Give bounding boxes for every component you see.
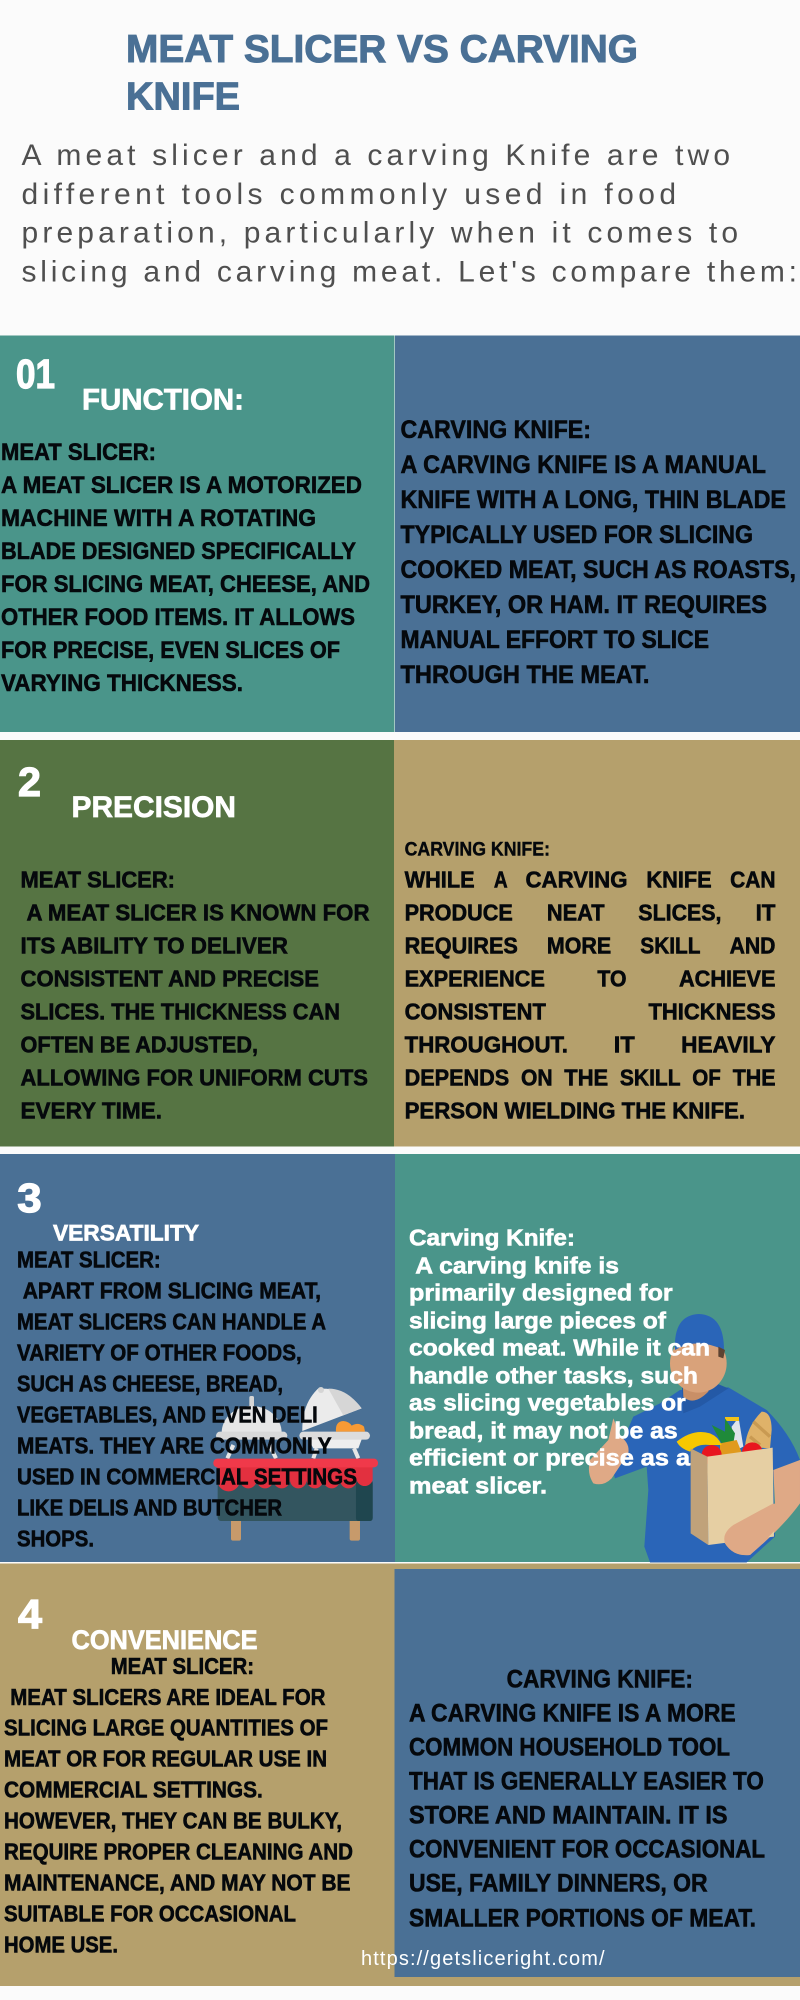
text: meat slicer versatility: MEAT SLICER:: [17, 1246, 161, 1272]
text: carving knife precision: A: [494, 866, 508, 892]
text: carving knife convenience: CARVING KNIFE:: [507, 1665, 693, 1693]
text: carving knife precision: IT: [756, 899, 776, 925]
text: meat slicer versatility: SHOPS.: [17, 1525, 94, 1551]
text: meat slicer versatility: VARIETY OF OTHER FOODS,: [17, 1339, 302, 1365]
text: meat slicer versatility: [17, 1246, 357, 1551]
text: meat slicer function: FOR SLICING MEAT, CHEESE, AND: [1, 571, 370, 598]
text: carving knife versatility: slicing large pieces of: [409, 1307, 666, 1333]
text: carving knife precision: [405, 866, 776, 1123]
panel: function, meat slicer: [0, 336, 394, 732]
text: carving knife precision: PERSON WIELDING THE KNIFE.: [405, 1097, 745, 1123]
text: meat slicer function: FOR PRECISE, EVEN SLICES OF: [1, 637, 340, 664]
text: carving knife versatility: meat slicer.: [409, 1472, 547, 1498]
text: meat slicer precision: OFTEN BE ADJUSTED,: [20, 1031, 258, 1057]
title: KNIFE: [126, 76, 240, 118]
text: carving knife precision: WHILE: [405, 866, 475, 892]
title: [126, 28, 638, 118]
number 3: 3: [17, 1175, 42, 1221]
text: carving knife function: MANUAL EFFORT TO SLICE: [400, 626, 709, 654]
text: meat slicer versatility: MEATS. THEY ARE COMMONLY: [17, 1432, 332, 1458]
text: meat slicer versatility: APART FROM SLICING MEAT,: [23, 1277, 321, 1303]
intro text: [22, 139, 797, 288]
text: carving knife precision: THICKNESS: [648, 998, 776, 1024]
title: MEAT SLICER VS CARVING: [126, 28, 638, 71]
text: meat slicer precision: [20, 866, 370, 1123]
text: meat slicer precision: SLICES. THE THICKNESS CAN: [20, 998, 340, 1024]
text: carving knife convenience: COMMON HOUSEHOLD TOOL: [409, 1734, 730, 1762]
text: carving knife precision: NEAT: [547, 899, 605, 925]
text: carving knife precision: KNIFE: [646, 866, 712, 892]
panel: precision, carving knife: [394, 740, 800, 1146]
panel: convenience, meat slicer: [0, 1564, 800, 1986]
text: meat slicer convenience: SUITABLE FOR OCCASIONAL: [4, 1901, 296, 1927]
text: meat slicer convenience: HOME USE.: [4, 1932, 118, 1958]
text: carving knife precision: CONSISTENT: [405, 998, 546, 1024]
text: carving knife convenience: USE, FAMILY DINNERS, OR: [409, 1870, 708, 1898]
text: carving knife convenience: THAT IS GENERALLY EASIER TO: [409, 1768, 764, 1796]
text: carving knife convenience: [409, 1665, 765, 1932]
text: carving knife convenience: SMALLER PORTIONS OF MEAT.: [409, 1904, 756, 1932]
text: carving knife versatility: Carving Knife:: [409, 1225, 575, 1251]
text: carving knife precision: ON: [521, 1064, 553, 1090]
text: meat slicer convenience: [4, 1653, 353, 1958]
text: meat slicer versatility: SUCH AS CHEESE, BREAD,: [17, 1370, 283, 1396]
text: carving knife precision: REQUIRES: [405, 932, 518, 958]
text: meat slicer precision: ITS ABILITY TO DELIVER: [20, 932, 288, 958]
text: meat slicer precision: EVERY TIME.: [20, 1097, 162, 1123]
text: carving knife precision: CARVING: [526, 866, 628, 892]
text: carving knife versatility: efficient or precise as a: [409, 1445, 691, 1471]
text: carving knife versatility: A carving knife is: [415, 1252, 619, 1278]
panel: versatility, carving knife: [395, 1154, 800, 1562]
text: carving knife precision: HEAVILY: [681, 1031, 776, 1057]
text: carving knife versatility: cooked meat. While it can: [409, 1335, 710, 1361]
text: meat slicer versatility: USED IN COMMERCIAL SETTINGS: [17, 1463, 357, 1489]
text: meat slicer function: MEAT SLICER:: [1, 439, 156, 466]
text: carving knife precision: CAN: [730, 866, 776, 892]
icon: food serving table: [213, 1387, 378, 1541]
text: carving knife precision: EXPERIENCE: [405, 965, 545, 991]
text: carving knife function: TYPICALLY USED FOR SLICING: [400, 521, 753, 549]
text: meat slicer function: VARYING THICKNESS.: [1, 670, 243, 697]
text: meat slicer convenience: MAINTENANCE, AND MAY NOT BE: [4, 1870, 350, 1896]
label: carving knife: CARVING KNIFE:: [405, 839, 550, 860]
text: carving knife function: THROUGH THE MEAT.: [400, 661, 650, 689]
number 4: 4: [18, 1591, 42, 1637]
text: carving knife function: TURKEY, OR HAM. IT REQUIRES: [400, 591, 767, 619]
text: carving knife precision: SKILL: [620, 1064, 681, 1090]
text: meat slicer versatility: LIKE DELIS AND BUTCHER: [17, 1494, 282, 1520]
text: carving knife precision: THROUGHOUT.: [405, 1031, 568, 1057]
text: meat slicer function: A MEAT SLICER IS A MOTORIZED: [1, 472, 362, 499]
text: meat slicer precision: CONSISTENT AND PRECISE: [20, 965, 319, 991]
text: meat slicer precision: A MEAT SLICER IS KNOWN FOR: [26, 899, 370, 925]
text: carving knife versatility: handle other tasks, such: [409, 1362, 698, 1388]
text: meat slicer precision: MEAT SLICER:: [20, 866, 175, 892]
text: meat slicer convenience: COMMERCIAL SETTINGS.: [4, 1777, 263, 1803]
panel: convenience, carving knife: [394, 1569, 800, 1977]
heading: function: FUNCTION:: [82, 384, 244, 416]
intro text: preparation, particularly when it comes to: [22, 216, 738, 250]
text: meat slicer convenience: MEAT SLICER:: [111, 1653, 254, 1679]
heading: precision: PRECISION: [72, 791, 236, 824]
text: carving knife precision: THE: [564, 1064, 608, 1090]
text: carving knife versatility: bread, it may not be as: [409, 1417, 678, 1443]
header: [22, 28, 797, 288]
text: meat slicer convenience: HOWEVER, THEY CAN BE BULKY,: [4, 1808, 342, 1834]
panel: precision, meat slicer: [0, 740, 394, 1146]
text: meat slicer function: [1, 439, 370, 697]
text: carving knife versatility: primarily designed for: [409, 1280, 673, 1306]
intro text: A meat slicer and a carving Knife are two: [22, 139, 730, 172]
number 2: 2: [18, 759, 41, 805]
text: carving knife precision: ACHIEVE: [679, 965, 776, 991]
text: meat slicer function: OTHER FOOD ITEMS. IT ALLOWS: [1, 604, 355, 631]
text: meat slicer convenience: MEAT SLICERS ARE IDEAL FOR: [10, 1684, 326, 1710]
text: meat slicer versatility: VEGETABLES, AND EVEN DELI: [17, 1401, 318, 1427]
text: carving knife precision: MORE: [547, 932, 611, 958]
number 01: 01: [16, 351, 55, 397]
illustration: man holding grocery bag: [589, 1314, 800, 1562]
text: meat slicer precision: ALLOWING FOR UNIFORM CUTS: [20, 1064, 368, 1090]
text: carving knife precision: DEPENDS: [405, 1064, 509, 1090]
text: carving knife precision: OF: [692, 1064, 721, 1090]
intro text: different tools commonly used in food: [22, 178, 676, 211]
text: carving knife versatility: as slicing vegetables or: [409, 1390, 686, 1416]
heading: versatility: VERSATILITY: [53, 1220, 199, 1246]
text: carving knife precision: SLICES,: [638, 899, 722, 925]
intro text: slicing and carving meat. Let's compare them:: [22, 256, 797, 288]
panel: versatility, meat slicer: [0, 1154, 395, 1562]
text: meat slicer function: MACHINE WITH A ROTATING: [1, 505, 316, 532]
text: carving knife convenience: CONVENIENT FOR OCCASIONAL: [409, 1836, 765, 1864]
text: meat slicer function: BLADE DESIGNED SPECIFICALLY: [1, 538, 356, 565]
text: carving knife function: A CARVING KNIFE IS A MANUAL: [400, 451, 766, 479]
text: meat slicer convenience: MEAT OR FOR REGULAR USE IN: [4, 1746, 327, 1772]
text: carving knife precision: PRODUCE: [405, 899, 513, 925]
text: carving knife versatility: [409, 1225, 710, 1498]
text: carving knife function: [400, 416, 796, 689]
text: carving knife precision: THE: [733, 1064, 776, 1090]
text: meat slicer versatility: MEAT SLICERS CAN HANDLE A: [17, 1308, 326, 1334]
text: meat slicer convenience: REQUIRE PROPER CLEANING AND: [4, 1839, 353, 1865]
text: carving knife convenience: STORE AND MAINTAIN. IT IS: [409, 1802, 728, 1830]
text: carving knife precision: TO: [597, 965, 626, 991]
text: carving knife precision: IT: [614, 1031, 635, 1057]
source url: https://getsliceright.com/: [361, 1948, 605, 1970]
panel: function, carving knife: [395, 336, 800, 732]
heading: convenience: CONVENIENCE: [72, 1625, 258, 1655]
text: carving knife precision: SKILL: [640, 932, 700, 958]
text: carving knife function: CARVING KNIFE:: [400, 416, 591, 444]
text: carving knife precision: AND: [730, 932, 776, 958]
text: carving knife convenience: A CARVING KNIFE IS A MORE: [409, 1700, 736, 1728]
text: meat slicer convenience: SLICING LARGE QUANTITIES OF: [4, 1715, 328, 1741]
